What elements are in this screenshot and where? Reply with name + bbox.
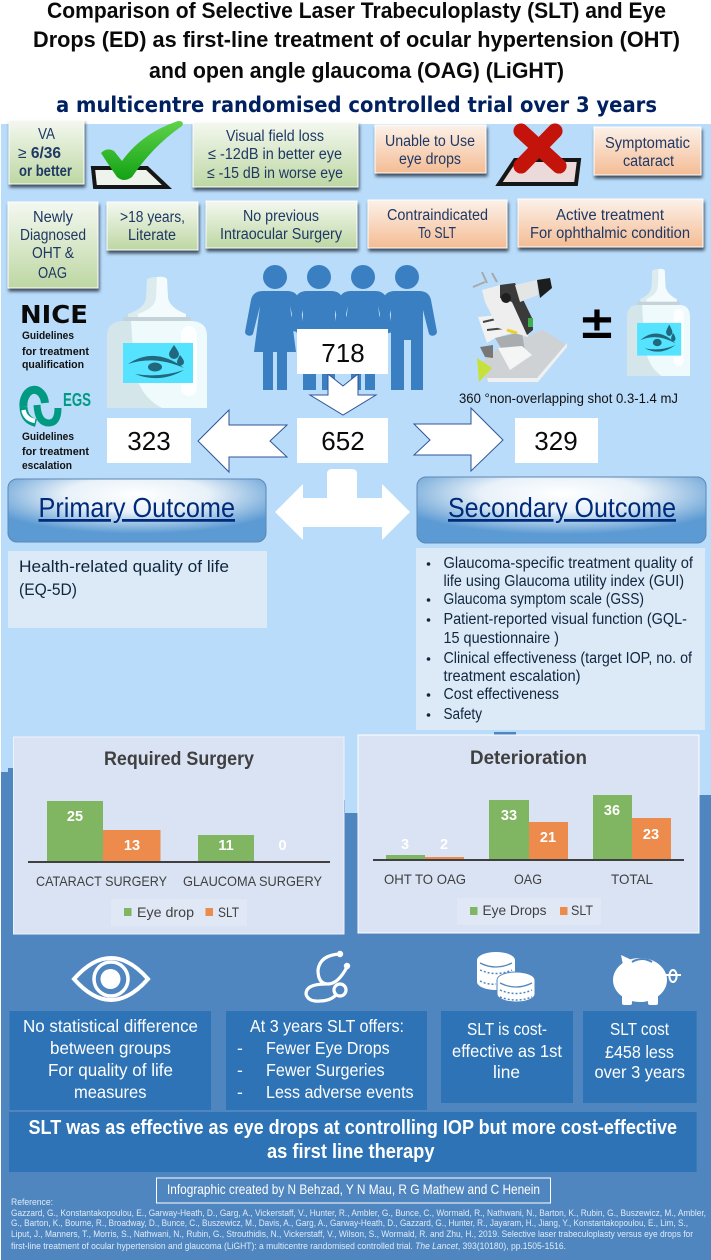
NICE guidelines xyxy=(20,300,89,371)
panel: secondary outcome list: Safety xyxy=(444,706,482,723)
EGS guidelines: escalation xyxy=(22,460,72,472)
panel: secondary outcome list: Patient-reported visual function (GQL- xyxy=(444,611,687,628)
title xyxy=(33,0,680,117)
NICE guidelines: qualification xyxy=(22,359,84,371)
NICE guidelines: for treatment xyxy=(22,346,89,358)
EGS guidelines: Guidelines xyxy=(22,431,74,443)
inclusion: visual acuity: or better xyxy=(19,163,72,180)
EGS guidelines xyxy=(22,390,91,472)
bar chart: required surgery: CATARACT SURGERY xyxy=(36,873,168,889)
title: Drops (ED) as first-line treatment of ocular hypertension (OHT) xyxy=(33,27,680,52)
inclusion: no previous surgery: Intraocular Surgery xyxy=(220,226,342,243)
callout: cost-effective: SLT is cost- xyxy=(467,1019,547,1039)
arrow: right to SLT xyxy=(414,408,503,471)
bar chart: deterioration: 21 xyxy=(540,830,556,846)
callout: SLT offers: - xyxy=(237,1060,243,1080)
NICE guidelines: NICE xyxy=(20,300,88,329)
callout: SLT offers: Less adverse events xyxy=(266,1082,414,1102)
inclusion: visual field loss: ≤ -12dB in better eye xyxy=(208,146,342,163)
bar chart: required surgery xyxy=(14,737,344,934)
inclusion: visual acuity xyxy=(9,120,84,184)
callout: SLT offers: Fewer Eye Drops xyxy=(266,1038,390,1058)
laser caption: 360 °non-overlapping shot 0.3-1.4 mJ xyxy=(459,390,678,406)
exclusion: unable to use eye drops: eye drops xyxy=(399,151,461,168)
callout: no statistical difference: measures xyxy=(74,1082,147,1102)
icon: group of patients xyxy=(245,265,437,390)
exclusion: active treatment xyxy=(518,199,703,247)
reference text: Reference: xyxy=(11,1197,53,1207)
heading: secondary outcome xyxy=(417,477,706,543)
inclusion: visual field loss: Visual field loss xyxy=(226,128,324,145)
bar chart: deterioration: Deterioration xyxy=(470,747,587,769)
inclusion: newly diagnosed: Diagnosed xyxy=(20,227,86,244)
panel: primary outcome text xyxy=(8,551,267,628)
callout: SLT offers xyxy=(226,1011,427,1110)
number box: 652 randomised: 652 xyxy=(321,426,365,456)
inclusion: visual acuity: VA xyxy=(38,126,56,143)
icon: green check mark xyxy=(93,121,183,187)
heading: secondary outcome: Secondary Outcome xyxy=(448,492,676,523)
panel: secondary outcome list: Clinical effectiveness (target IOP, no. of xyxy=(444,650,693,667)
inclusion: age and literacy: Literate xyxy=(128,227,176,244)
exclusion: active treatment: For ophthalmic condition xyxy=(530,225,690,242)
callout: cost saving: over 3 years xyxy=(594,1062,685,1082)
panel: secondary outcome list: Glaucoma-specific treatment quality of xyxy=(444,555,694,572)
inclusion: newly diagnosed: Newly xyxy=(33,209,73,226)
callout: cost saving: SLT cost xyxy=(610,1019,669,1039)
exclusion: unable to use eye drops: Unable to Use xyxy=(385,133,475,150)
callout: SLT offers: - xyxy=(237,1038,243,1058)
EGS guidelines: EGS xyxy=(63,390,91,410)
callout: cost-effective: effective as 1st xyxy=(452,1041,562,1061)
title: a multicentre randomised controlled trial over 3 years xyxy=(56,93,657,117)
exclusion: symptomatic cataract xyxy=(594,127,701,175)
bar chart: deterioration: OAG xyxy=(514,871,542,887)
icon: coins xyxy=(477,952,535,1002)
callout: cost-effective: line xyxy=(493,1062,520,1082)
inclusion: visual field loss: ≤ -15 dB in worse eye xyxy=(207,165,343,182)
inclusion: newly diagnosed: OAG xyxy=(38,265,67,282)
EGS guidelines: for treatment xyxy=(22,446,89,458)
bar chart: deterioration: 23 xyxy=(643,827,659,843)
inclusion: age and literacy: >18 years, xyxy=(120,209,185,226)
bar chart: deterioration: 2 xyxy=(440,837,448,853)
callout: no statistical difference xyxy=(10,1011,211,1110)
bar chart: required surgery: Eye drop xyxy=(137,904,194,920)
number box: 718 enrolled xyxy=(297,329,388,374)
bar chart: required surgery: SLT xyxy=(218,904,239,920)
inclusion: visual field loss xyxy=(193,122,358,187)
conclusion banner: as first line therapy xyxy=(267,1140,435,1163)
callout: SLT offers: Fewer Surgeries xyxy=(266,1060,385,1080)
panel: secondary outcome list: Cost effectiveness xyxy=(444,686,559,703)
panel: primary outcome text: (EQ-5D) xyxy=(19,580,77,599)
panel: secondary outcome list: Glaucoma symptom scale (GSS) xyxy=(444,591,644,608)
icon: piggy bank xyxy=(613,955,681,1005)
heading: primary outcome: Primary Outcome xyxy=(38,492,235,523)
bar chart: deterioration: SLT xyxy=(571,902,593,918)
conclusion banner xyxy=(9,1112,697,1172)
panel: secondary outcome list: life using Glaucoma utility index (GUI) xyxy=(444,573,684,590)
icon: eye xyxy=(74,958,148,1000)
plus-minus symbol: ± xyxy=(578,296,616,349)
arrow: down from 718 to 652 xyxy=(310,374,376,415)
inclusion: visual acuity: ≥ 6/36 xyxy=(18,145,61,162)
bar chart: deterioration: 36 xyxy=(604,803,620,819)
exclusion: symptomatic cataract: cataract xyxy=(623,153,675,170)
exclusion: active treatment: Active treatment xyxy=(556,207,665,224)
callout: cost saving xyxy=(583,1011,697,1103)
bar chart: deterioration: OHT TO OAG xyxy=(384,871,466,887)
callout: no statistical difference: No statistical difference xyxy=(23,1016,198,1036)
bar chart: required surgery: 25 xyxy=(67,809,83,825)
inclusion: newly diagnosed xyxy=(8,202,98,288)
bar chart: deterioration: 33 xyxy=(501,808,517,824)
panel: secondary outcome list xyxy=(416,548,705,730)
bar chart: required surgery: 0 xyxy=(278,838,287,854)
callout: no statistical difference: For quality of life xyxy=(48,1060,173,1080)
callout: no statistical difference: between groups xyxy=(50,1038,171,1058)
double arrow between outcomes xyxy=(275,469,410,540)
icon: red cross xyxy=(499,131,579,184)
inclusion: no previous surgery xyxy=(206,201,357,248)
number box: 323 eye drops xyxy=(107,418,191,463)
bar chart: required surgery: 13 xyxy=(124,838,140,854)
bar chart: deterioration: 3 xyxy=(401,837,409,853)
bar chart: deterioration: Eye Drops xyxy=(482,902,546,918)
reference text: first-line treatment of ocular hypertension and glaucoma (LiGHT): a multicentre randomised controlled trial. The Lancet, 393(10180), pp.1505-1516. xyxy=(11,1241,566,1251)
icon: eye drop bottle (left) xyxy=(107,277,207,408)
callout: SLT offers: At 3 years SLT offers: xyxy=(250,1016,404,1036)
bar chart: required surgery: 11 xyxy=(218,838,234,854)
number box: 323 eye drops: 323 xyxy=(127,426,171,456)
credit box xyxy=(156,1178,550,1203)
bar chart: deterioration: TOTAL xyxy=(611,871,653,887)
panel: secondary outcome list: 15 questionnaire ) xyxy=(444,630,559,647)
icon: eye drop bottle (right) xyxy=(627,269,690,376)
bar chart: required surgery: GLAUCOMA SURGERY xyxy=(183,873,323,889)
bar chart: deterioration xyxy=(358,735,699,933)
number box: 652 randomised xyxy=(297,418,388,463)
exclusion: symptomatic cataract: Symptomatic xyxy=(605,135,690,152)
arrow: left to eye drops xyxy=(198,410,287,472)
exclusion: contraindicated to SLT: Contraindicated xyxy=(387,207,488,224)
bar chart: required surgery: Required Surgery xyxy=(104,748,254,770)
heading: primary outcome xyxy=(8,479,266,542)
callout: cost saving: £458 less xyxy=(605,1042,674,1062)
exclusion: contraindicated to SLT xyxy=(368,200,507,248)
number box: 329 SLT xyxy=(515,418,598,463)
NICE guidelines: Guidelines xyxy=(22,330,74,342)
inclusion: age and literacy xyxy=(107,202,198,250)
callout: cost-effective xyxy=(441,1011,573,1103)
reference text xyxy=(11,1197,706,1251)
number box: 329 SLT: 329 xyxy=(534,426,578,456)
title: and open angle glaucoma (OAG) (LiGHT) xyxy=(149,58,564,83)
callout: SLT offers: - xyxy=(237,1082,243,1102)
icon: stethoscope xyxy=(306,952,349,1001)
number box: 718 enrolled: 718 xyxy=(321,338,365,368)
panel: primary outcome text: Health-related quality of life xyxy=(19,557,229,576)
exclusion: unable to use eye drops xyxy=(375,125,486,173)
exclusion: contraindicated to SLT: To SLT xyxy=(418,225,456,242)
panel: secondary outcome list: treatment escalation) xyxy=(444,668,580,685)
credit box: Infographic created by N Behzad, Y N Mau, R G Mathew and C Henein xyxy=(167,1181,540,1197)
inclusion: newly diagnosed: OHT & xyxy=(32,245,75,262)
inclusion: no previous surgery: No previous xyxy=(243,208,319,225)
icon: SLT laser slit lamp xyxy=(473,272,567,382)
